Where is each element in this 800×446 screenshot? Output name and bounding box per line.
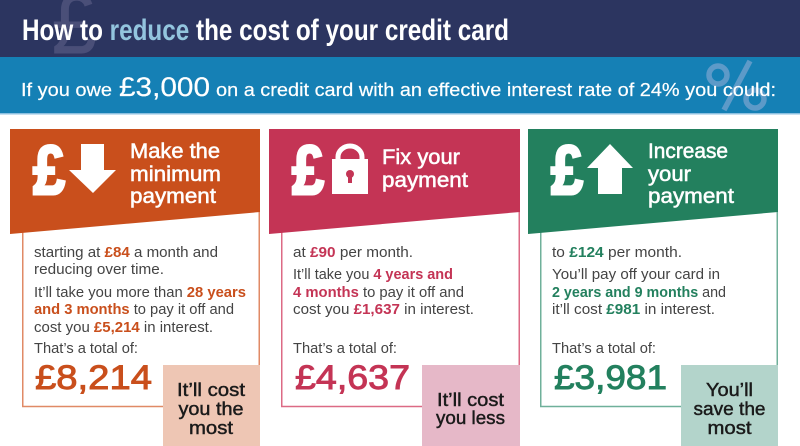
title banner — [0, 0, 800, 71]
total figure: £4,637 — [295, 359, 410, 397]
callout: It’ll cost — [437, 389, 504, 410]
callout: most — [189, 417, 233, 438]
callout: you less — [436, 407, 505, 428]
panel heading: payment — [130, 184, 216, 208]
icon: pound with up arrow: £ — [551, 131, 583, 209]
callout: you the — [178, 398, 244, 419]
subtitle banner — [0, 57, 800, 114]
body text: That’s a total of: — [552, 341, 656, 357]
body text: cost you £5,214 in interest. — [34, 320, 213, 336]
icon: pound with up arrow — [551, 131, 633, 209]
panel heading — [382, 145, 468, 192]
body text — [34, 245, 246, 357]
total figure: £8,214 — [35, 359, 152, 397]
body text: 4 months to pay it off and — [293, 285, 464, 301]
callout: most — [708, 417, 752, 438]
subtitle text: on a credit card with an effective interest rate of 24% you could: — [216, 80, 776, 100]
subtitle text: If you owe — [21, 80, 112, 100]
panel: fix your payment — [269, 129, 520, 446]
title: How to reduce the cost of your credit card — [22, 14, 509, 47]
body text: starting at £84 a month and — [34, 245, 218, 261]
panel: make the minimum payment — [10, 129, 260, 446]
panel heading: your — [648, 162, 691, 186]
panel heading — [130, 139, 221, 208]
icon: pound with padlock — [292, 131, 368, 209]
body text: That’s a total of: — [34, 341, 138, 357]
panel heading: minimum — [130, 162, 221, 186]
callout: save the — [694, 398, 766, 419]
body text: to £124 per month. — [552, 245, 682, 261]
panel header — [528, 129, 778, 234]
panel heading — [648, 139, 734, 208]
subtitle text: £3,000 — [119, 72, 210, 102]
body text: That’s a total of: — [293, 341, 397, 357]
icon: pound with padlock: £ — [292, 131, 324, 209]
body text: and 3 months to pay it off and — [34, 302, 234, 318]
panel heading: Fix your — [382, 145, 460, 169]
body text — [293, 245, 474, 357]
body text: You’ll pay off your card in — [552, 267, 720, 283]
callout — [163, 365, 260, 446]
callout — [422, 365, 520, 446]
body text: reducing over time. — [34, 262, 164, 278]
callout: You’ll — [706, 379, 753, 400]
body text: It’ll take you 4 years and — [293, 267, 453, 283]
body text: it’ll cost £981 in interest. — [552, 302, 715, 318]
icon: pound with down arrow — [33, 131, 116, 209]
panel heading: payment — [382, 168, 468, 192]
callout — [681, 365, 778, 446]
panel header — [269, 129, 520, 234]
icon: ghost percent — [709, 61, 764, 110]
panel heading: Make the — [130, 139, 220, 163]
panel heading: payment — [648, 184, 734, 208]
body text: at £90 per month. — [293, 245, 413, 261]
total figure: £3,981 — [554, 359, 667, 397]
panel: increase your payment — [528, 129, 778, 446]
body text — [552, 245, 726, 357]
panel header — [10, 129, 260, 234]
panel heading: Increase — [648, 139, 728, 163]
body text: 2 years and 9 months and — [552, 285, 726, 301]
icon: pound with down arrow: £ — [33, 131, 65, 209]
body text: cost you £1,637 in interest. — [293, 302, 474, 318]
callout: It’ll cost — [177, 379, 245, 400]
body text: It’ll take you more than 28 years — [34, 285, 246, 301]
subtitle text — [21, 72, 776, 102]
